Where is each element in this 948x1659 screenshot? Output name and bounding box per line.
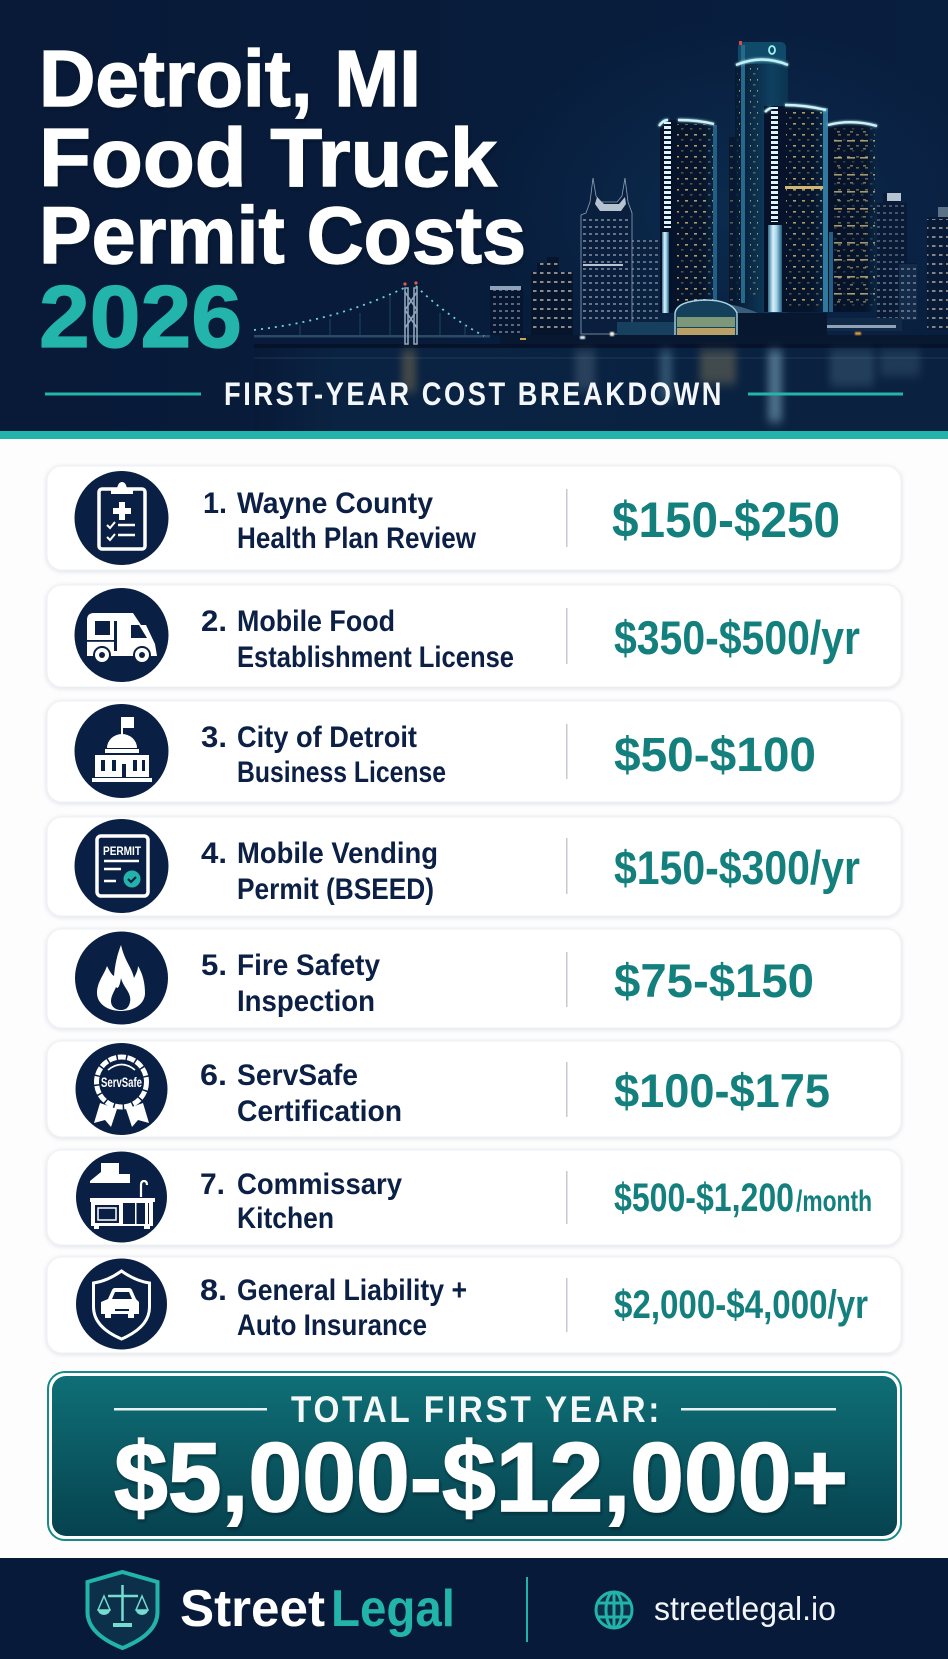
item 8 label: Auto Insurance xyxy=(237,1309,427,1342)
tower logo ring xyxy=(769,46,775,54)
item 2 label: 2. xyxy=(201,605,227,638)
icon: permit document xyxy=(74,819,168,913)
item 7 label: Kitchen xyxy=(237,1202,334,1235)
item 1 price: $150-$250 xyxy=(612,492,840,548)
item 3 label xyxy=(201,721,446,789)
icon: food truck xyxy=(74,588,168,682)
item 8 label: General Liability + xyxy=(237,1274,467,1307)
panel: header xyxy=(0,0,948,432)
item 2 price: $350-$500/yr xyxy=(614,611,860,664)
left tower xyxy=(660,120,717,313)
item 7 label: 7. xyxy=(200,1168,225,1201)
item 3 label: City of Detroit xyxy=(237,721,417,754)
item 4 label xyxy=(201,837,438,906)
item 8 label xyxy=(200,1274,467,1342)
total amount: $5,000-$12,000+ xyxy=(114,1422,848,1532)
title year: 2026 xyxy=(39,267,242,366)
logo wordmark: Legal xyxy=(331,1580,455,1638)
website url: streetlegal.io xyxy=(654,1590,836,1627)
panel: total first year xyxy=(48,1372,901,1540)
panel: item 2 Mobile Food Establishment License xyxy=(47,585,901,687)
item 7 label xyxy=(200,1168,402,1235)
logo wordmark xyxy=(180,1580,455,1638)
icon: flame xyxy=(75,932,168,1024)
subtitle with rules xyxy=(45,376,903,412)
item 5 label: 5. xyxy=(201,949,227,982)
icon: ServSafe rosette xyxy=(76,1043,168,1135)
right-center tower xyxy=(764,106,828,312)
background buildings xyxy=(490,287,523,335)
item 4 label: 4. xyxy=(201,837,227,870)
title: Detroit, MI xyxy=(39,34,421,123)
item 8 price: $2,000-$4,000/yr xyxy=(614,1283,868,1327)
icon: shield with car xyxy=(76,1258,167,1350)
panel: item 7 Commissary Kitchen xyxy=(47,1150,901,1245)
item 6 label: ServSafe xyxy=(237,1059,358,1092)
title xyxy=(39,34,526,281)
item 6 label: Certification xyxy=(237,1095,402,1128)
title: Permit Costs xyxy=(39,191,526,281)
logo wordmark: Street xyxy=(180,1580,325,1638)
icon: ServSafe rosette: ServSafe xyxy=(101,1074,142,1090)
icon: kitchen xyxy=(76,1152,167,1242)
item 7 price: /month xyxy=(796,1185,872,1218)
panel: item 5 Fire Safety Inspection xyxy=(47,929,901,1028)
panel: item 4 Mobile Vending Permit (BSEED) xyxy=(47,817,901,916)
icon: globe xyxy=(596,1592,632,1628)
icon: clipboard xyxy=(74,471,168,565)
item 1 label: Wayne County xyxy=(237,487,433,520)
total heading: TOTAL FIRST YEAR: xyxy=(291,1389,662,1430)
right tower xyxy=(828,123,877,312)
item 3 label: Business License xyxy=(237,756,446,789)
item 6 label: 6. xyxy=(200,1059,227,1092)
panel: item 1 Wayne County Health Plan Review xyxy=(47,466,901,570)
item 1 label: 1. xyxy=(203,487,227,520)
item 5 label: Inspection xyxy=(237,985,375,1018)
panel: item 6 ServSafe Certification xyxy=(47,1041,901,1137)
item 3 price: $50-$100 xyxy=(614,729,816,782)
illustration: river reflection xyxy=(254,348,948,432)
title: Food Truck xyxy=(39,111,498,204)
item 6 price: $100-$175 xyxy=(614,1064,830,1117)
item 6 label xyxy=(200,1059,402,1128)
item 2 label: Establishment License xyxy=(237,641,514,674)
icon: city hall xyxy=(74,704,168,798)
panel: item 3 City of Detroit Business License xyxy=(47,701,901,802)
illustration: suspension bridge xyxy=(254,281,490,344)
logo: shield with scales xyxy=(88,1572,158,1648)
item 5 label: Fire Safety xyxy=(237,949,380,982)
item 1 label xyxy=(203,487,477,555)
item 7 price: $500-$1,200 xyxy=(614,1176,794,1220)
subtitle with rules: FIRST-YEAR COST BREAKDOWN xyxy=(224,376,724,412)
panel: item 8 General Liability + Auto Insurance xyxy=(47,1257,901,1353)
item 4 label: Permit (BSEED) xyxy=(237,873,434,906)
center tower xyxy=(735,60,788,313)
item 7 label: Commissary xyxy=(237,1168,402,1201)
item 2 label xyxy=(201,605,514,674)
item 4 price: $150-$300/yr xyxy=(614,841,860,894)
atrium and low buildings xyxy=(617,322,677,336)
illustration: Detroit skyline at night xyxy=(254,41,948,348)
icon: permit document: PERMIT xyxy=(103,846,141,858)
item 2 label: Mobile Food xyxy=(237,605,395,638)
item 4 label: Mobile Vending xyxy=(237,837,438,870)
item 5 price: $75-$150 xyxy=(614,954,814,1007)
header accent bar xyxy=(0,431,948,439)
item 5 label xyxy=(201,949,380,1018)
item 8 label: 8. xyxy=(200,1274,227,1307)
item 1 label: Health Plan Review xyxy=(237,522,477,555)
panel: footer xyxy=(0,1558,948,1659)
item 3 label: 3. xyxy=(201,721,227,754)
